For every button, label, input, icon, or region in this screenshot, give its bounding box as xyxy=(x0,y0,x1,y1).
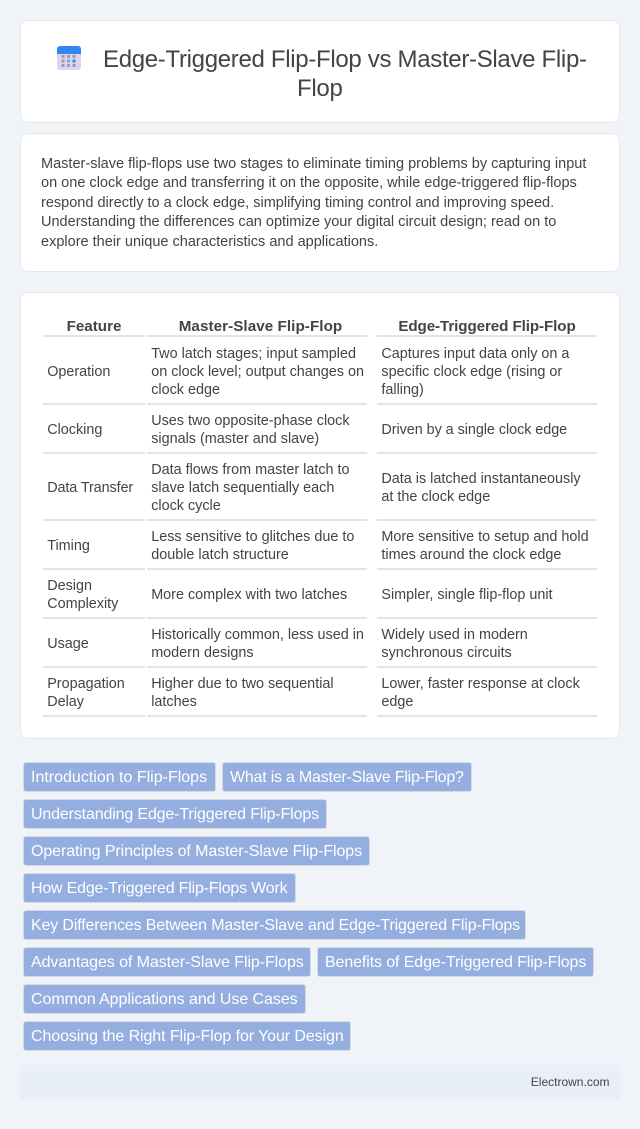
row: Timing: times around the clock edge xyxy=(381,547,561,563)
text block: introduction: Understanding the differences can optimize your digital circuit design; read on to xyxy=(41,214,556,230)
row: Clocking: Uses two opposite-phase clock xyxy=(151,413,350,429)
row: Operation: specific clock edge (rising or xyxy=(381,364,562,380)
tag xyxy=(23,947,311,977)
text block: introduction: explore their unique characteristics and applications. xyxy=(41,234,378,250)
panel: comparison table xyxy=(20,292,620,739)
table header: Edge-Triggered Flip-Flop xyxy=(398,318,576,335)
title: Flop xyxy=(297,75,342,102)
row: Operation: falling) xyxy=(381,382,424,398)
row: Timing: More sensitive to setup and hold xyxy=(381,529,589,545)
row: Data Transfer: Data Transfer xyxy=(47,480,133,496)
tag: Choosing the Right Flip-Flop for Your Design xyxy=(31,1028,344,1045)
row: Operation: on clock level; output changes on xyxy=(151,364,364,380)
row: Data Transfer: Data is latched instantaneously xyxy=(381,471,581,487)
row: Operation: Two latch stages; input sampled xyxy=(151,346,356,362)
row: Clocking: signals (master and slave) xyxy=(151,431,319,447)
row: Data Transfer: at the clock edge xyxy=(381,489,490,505)
row: Operation: clock edge xyxy=(151,382,220,398)
tag: Introduction to Flip-Flops xyxy=(31,769,207,786)
tag xyxy=(23,910,526,940)
row: Timing: Timing xyxy=(47,538,90,554)
tag: How Edge-Triggered Flip-Flops Work xyxy=(31,880,287,897)
row: Timing xyxy=(47,529,589,563)
table header: Master-Slave Flip-Flop xyxy=(179,318,342,335)
text block: introduction: Master-slave flip-flops use two stages to eliminate timing problems by capturing input xyxy=(41,156,586,172)
tag: Advantages of Master-Slave Flip-Flops xyxy=(31,954,304,971)
row: Propagation Delay: Delay xyxy=(47,694,84,710)
row: Clocking: Driven by a single clock edge xyxy=(381,422,567,438)
row: Usage: Usage xyxy=(47,636,89,652)
text block: introduction xyxy=(41,156,586,250)
row: Data Transfer xyxy=(47,462,581,514)
row: Propagation Delay: edge xyxy=(381,694,413,710)
row: Clocking: Clocking xyxy=(47,422,102,438)
tag xyxy=(23,984,306,1014)
row: Data Transfer: slave latch sequentially each xyxy=(151,480,334,496)
row: Usage: synchronous circuits xyxy=(381,645,512,661)
row: Propagation Delay xyxy=(47,676,580,710)
row: Propagation Delay: Higher due to two sequential xyxy=(151,676,334,692)
text block: introduction: respond directly to a clock edge, simplifying timing control and improving speed. xyxy=(41,195,554,211)
panel: introduction xyxy=(20,133,620,272)
row: Usage: Historically common, less used in xyxy=(151,627,364,643)
row: Propagation Delay: Propagation xyxy=(47,676,125,692)
title xyxy=(103,46,587,102)
tag xyxy=(23,799,327,829)
row: Design Complexity: Design xyxy=(47,578,92,594)
row: Propagation Delay: latches xyxy=(151,694,197,710)
row: Propagation Delay: Lower, faster response at clock xyxy=(381,676,580,692)
tag: Benefits of Edge-Triggered Flip-Flops xyxy=(325,954,586,971)
tag: What is a Master-Slave Flip-Flop? xyxy=(230,769,464,786)
row: Operation: Operation xyxy=(47,364,110,380)
footer xyxy=(20,1065,620,1099)
panel: topic tags xyxy=(23,762,594,1051)
table header: Feature xyxy=(67,318,121,335)
tag xyxy=(23,1021,351,1051)
row: Timing: Less sensitive to glitches due to xyxy=(151,529,354,545)
row: Usage: modern designs xyxy=(151,645,254,661)
row: Usage xyxy=(47,627,528,661)
footer credit: Electrown.com xyxy=(531,1075,610,1089)
tag: Operating Principles of Master-Slave Flip-Flops xyxy=(31,843,362,860)
row: Usage: Widely used in modern xyxy=(381,627,528,643)
tag xyxy=(23,836,370,866)
tag: Common Applications and Use Cases xyxy=(31,991,298,1008)
row: Data Transfer: Data flows from master latch to xyxy=(151,462,350,478)
panel: header xyxy=(20,20,620,123)
tag: Key Differences Between Master-Slave and Edge-Triggered Flip-Flops xyxy=(31,917,520,934)
row: Data Transfer: clock cycle xyxy=(151,498,221,514)
row: Design Complexity: Complexity xyxy=(47,596,118,612)
tag: Understanding Edge-Triggered Flip-Flops xyxy=(31,806,319,823)
row: Design Complexity xyxy=(47,578,553,612)
tag xyxy=(222,762,472,792)
row: Operation xyxy=(47,346,570,398)
row: Design Complexity: Simpler, single flip-flop unit xyxy=(381,587,553,603)
row: Design Complexity: More complex with two latches xyxy=(151,587,347,603)
tag xyxy=(23,762,216,792)
row: Timing: double latch structure xyxy=(151,547,289,563)
icon: calendar grid xyxy=(57,46,81,70)
row: Clocking xyxy=(47,413,567,447)
row: Operation: Captures input data only on a xyxy=(381,346,569,362)
tag xyxy=(317,947,594,977)
title: Edge-Triggered Flip-Flop vs Master-Slave Flip- xyxy=(103,46,587,73)
tag xyxy=(23,873,296,903)
table header xyxy=(67,318,576,335)
text block: introduction: on one clock edge and transferring it on the opposite, while edge-triggered flip-flops xyxy=(41,175,577,191)
